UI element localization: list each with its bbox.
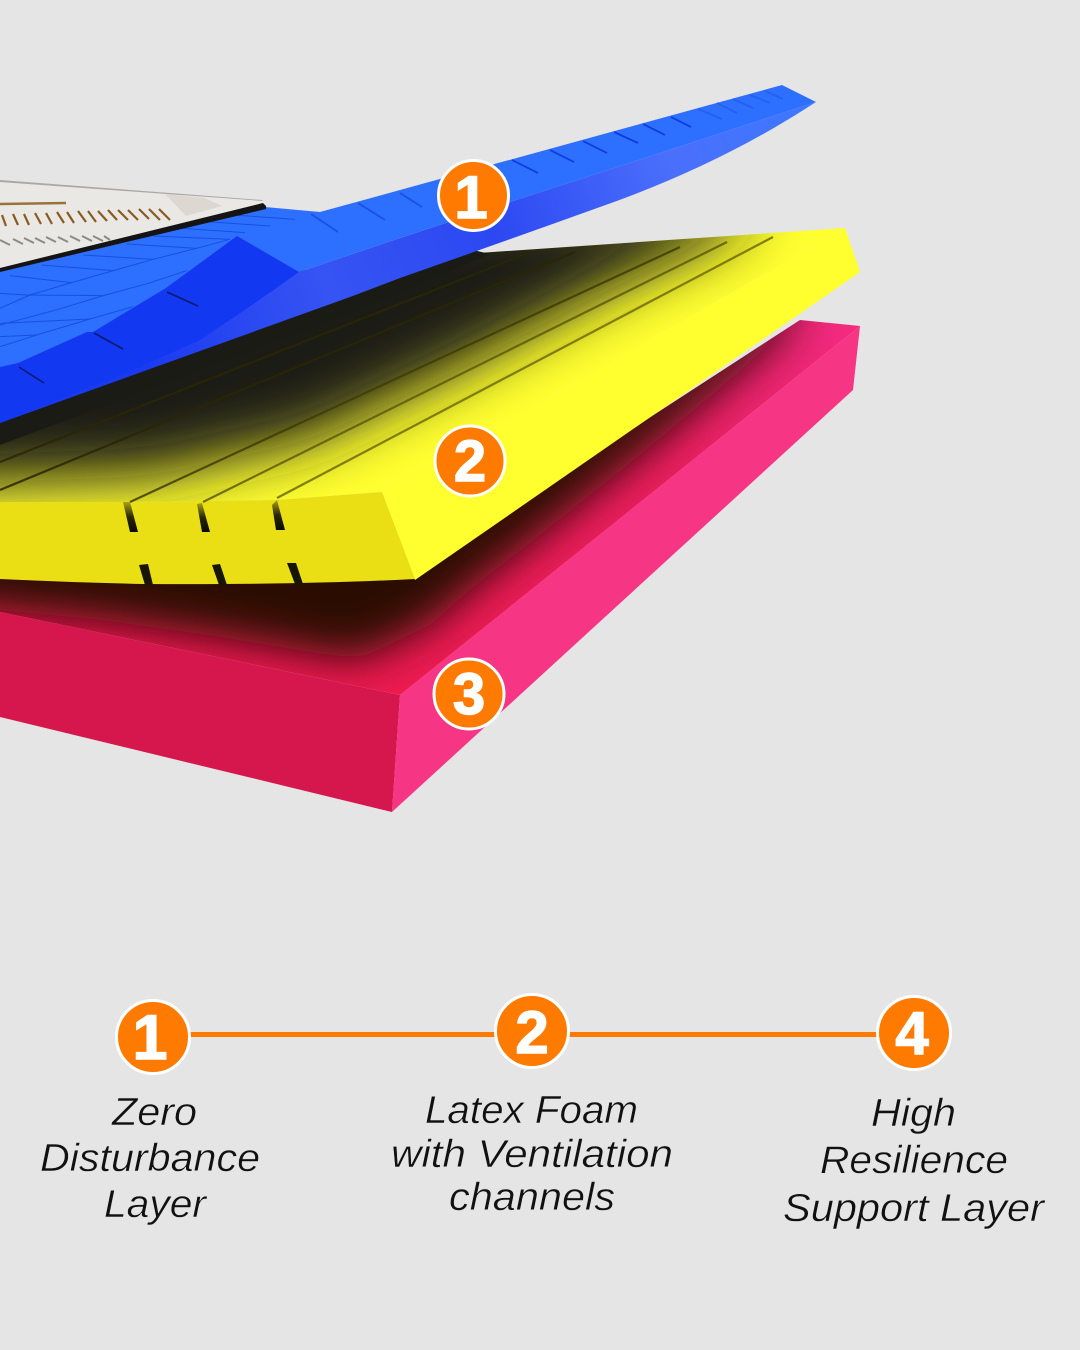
legend label 3: Support Layer [783, 1187, 1046, 1230]
legend label 2: Latex Foam [425, 1089, 638, 1132]
legend item 3 [783, 996, 1046, 1230]
dark edge under blue layer [0, 250, 490, 445]
legend badge 1: 1 [132, 1003, 168, 1073]
legend item 1 [40, 1000, 260, 1226]
legend connector line [188, 1032, 880, 1037]
legend label 2: with Ventilation [391, 1133, 673, 1176]
pink layer top face with shadow [0, 290, 860, 695]
badge 2 on yellow layer [435, 426, 505, 496]
legend label 1 [40, 1091, 260, 1226]
badge 3 on pink layer [434, 659, 504, 729]
ventilation channel lines [0, 237, 773, 502]
legend item 2 [391, 994, 673, 1219]
white mattress cover [0, 180, 266, 272]
legend label 1: Disturbance [40, 1137, 260, 1180]
blue border slits [19, 292, 198, 383]
blue quilted grid lines [0, 215, 295, 347]
legend label 1: Layer [104, 1183, 208, 1226]
legend label 2 [391, 1089, 673, 1219]
yellow layer top face [0, 200, 845, 502]
blue layer top face [0, 85, 816, 400]
legend label 1: Zero [111, 1091, 197, 1134]
legend badge 1 [116, 1000, 190, 1074]
legend label 3: High [871, 1092, 956, 1135]
legend label 3 [783, 1092, 1046, 1230]
cover brown logo mark [0, 203, 66, 204]
pink layer side face [392, 326, 860, 812]
blue dark border strip [0, 236, 299, 423]
badge 3 on pink layer: 3 [453, 662, 485, 727]
blue zero disturbance layer [0, 85, 816, 423]
cover grey vent marks [0, 236, 110, 245]
cover dark piping [0, 203, 266, 272]
cover beige patch [165, 194, 222, 216]
yellow layer front face [0, 492, 415, 584]
yellow layer side face [382, 228, 860, 580]
badge 1 on blue layer: 1 [454, 164, 488, 231]
lower channel notches [139, 563, 303, 585]
cover edge shading [0, 180, 263, 201]
cover surface [0, 180, 266, 268]
badge 2 on yellow layer: 2 [454, 429, 486, 494]
legend badge 4 [878, 996, 950, 1070]
yellow latex foam layer [0, 200, 860, 585]
badge 1 on blue layer [438, 160, 508, 231]
cover brown vent marks [2, 209, 170, 226]
blue layer side face [0, 102, 816, 423]
legend label 3: Resilience [820, 1139, 1008, 1182]
legend label 2: channels [449, 1176, 615, 1219]
pink support layer [0, 290, 860, 812]
legend badge 4: 4 [895, 1000, 929, 1067]
upper channel notches [123, 500, 285, 532]
pink layer front face [0, 612, 400, 812]
blue surface tick marks [311, 91, 783, 232]
legend badge 2 [496, 994, 568, 1068]
legend badge 2: 2 [515, 999, 549, 1066]
